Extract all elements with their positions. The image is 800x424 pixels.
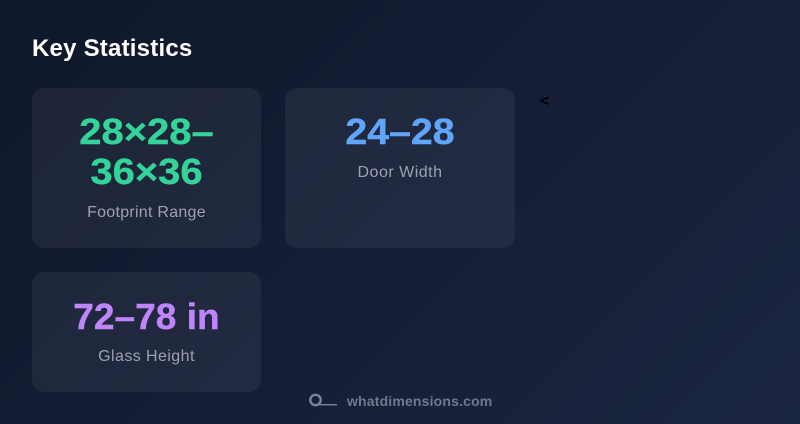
brand name: whatdimensions.com — [347, 393, 492, 409]
stat value: glass height: 72–78 in — [73, 296, 220, 337]
panel: door width — [285, 88, 515, 248]
stat value: door width: 24–28 — [345, 111, 455, 152]
panel: glass height — [32, 272, 261, 392]
stray glyph: < — [540, 93, 549, 110]
stat label: door width: Door Width — [357, 164, 443, 181]
stat value: footprint range — [79, 111, 214, 192]
footer brand — [309, 393, 492, 409]
icon: tape measure — [309, 394, 337, 406]
stat value: footprint range: 28×28– — [79, 111, 214, 152]
stat label: glass height: Glass Height — [98, 348, 195, 365]
title: Key Statistics — [32, 35, 192, 62]
stat value: footprint range: 36×36 — [90, 151, 203, 192]
stat label: footprint range: Footprint Range — [87, 204, 206, 221]
panel: footprint range — [32, 88, 261, 248]
